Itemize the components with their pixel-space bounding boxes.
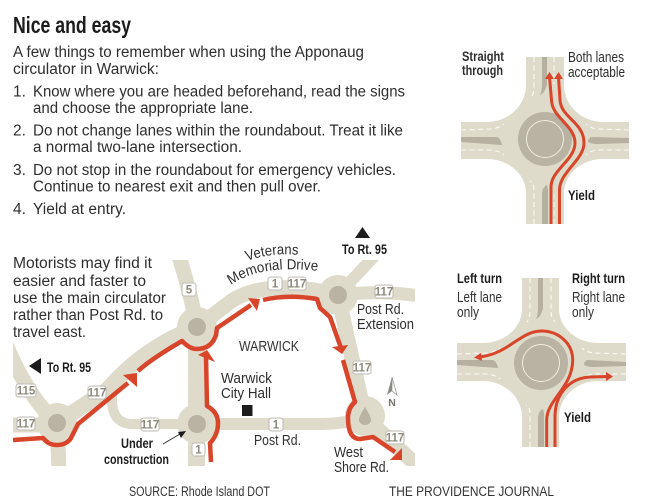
label: under construction: construction xyxy=(104,452,169,467)
intro and numbered tips: 3. xyxy=(13,162,26,179)
label: to Rt. 95 west xyxy=(29,358,91,375)
diagram: straight through roundabout xyxy=(461,49,629,224)
route number badges: 115 xyxy=(17,386,36,398)
intro and numbered tips xyxy=(13,44,405,218)
label: West Shore Rd. xyxy=(334,445,389,476)
red route lines xyxy=(545,72,584,224)
label: straight through: through xyxy=(462,63,503,78)
callout: motorists note: easier and faster to xyxy=(13,273,146,290)
label: Warwick: WARWICK xyxy=(239,339,299,355)
red circulator route xyxy=(13,297,402,462)
label: Post Rd. Extension xyxy=(357,302,414,333)
label: right turn: Right turn xyxy=(572,271,625,286)
red route lines xyxy=(474,331,613,447)
callout: motorists note: travel east. xyxy=(13,324,86,341)
intro and numbered tips: Do not change lanes within the roundabout. Treat it like xyxy=(33,122,403,140)
icon: north arrow: N xyxy=(388,397,396,409)
label: West Shore Rd.: West xyxy=(334,445,363,461)
source credit: SOURCE: Rhode Island DOT xyxy=(129,484,270,499)
map of Warwick xyxy=(12,227,415,476)
landmark: Warwick City Hall: Warwick xyxy=(221,371,273,387)
label: left turn xyxy=(457,271,502,321)
label: Post Rd. Extension: Extension xyxy=(357,317,414,333)
route number badges: 117 xyxy=(386,432,404,444)
callout: motorists note xyxy=(13,255,166,341)
label: both lanes acceptable: acceptable xyxy=(568,65,625,81)
route number badges: 117 xyxy=(17,418,35,430)
intro and numbered tips: A few things to remember when using the Apponaug xyxy=(13,44,364,61)
label: Post Rd.: Post Rd. xyxy=(254,433,301,449)
intro and numbered tips: circulator in Warwick: xyxy=(13,61,159,78)
route number badges: 1 xyxy=(273,420,280,432)
label: right turn xyxy=(572,271,625,321)
label: left turn: only xyxy=(457,305,480,321)
callout: motorists note: Motorists may find it xyxy=(13,255,153,272)
intro and numbered tips: and choose the appropriate lane. xyxy=(33,100,253,117)
route number badges xyxy=(16,277,404,456)
intro and numbered tips: Continue to nearest exit and then pull over. xyxy=(33,178,321,196)
title: Nice and easy xyxy=(13,12,131,38)
road network xyxy=(13,260,415,466)
label: to Rt. 95 north xyxy=(342,227,387,257)
label: straight through: Straight xyxy=(462,49,504,64)
route number badges: 117 xyxy=(288,278,306,290)
callout: motorists note: use the main circulator xyxy=(13,290,166,307)
intro and numbered tips: Know where you are headed beforehand, read the signs xyxy=(33,84,405,100)
route number badges: 117 xyxy=(88,388,106,400)
label: West Shore Rd.: Shore Rd. xyxy=(334,460,389,476)
label: left turn: Left lane xyxy=(457,290,502,306)
route number badges: 117 xyxy=(375,286,393,298)
label: both lanes acceptable xyxy=(568,50,625,81)
route number badges: 117 xyxy=(353,362,371,374)
publisher credit: THE PROVIDENCE JOURNAL xyxy=(389,484,554,499)
route number badges: 1 xyxy=(195,444,202,456)
landmark: Warwick City Hall xyxy=(221,371,273,416)
label: to Rt. 95 north: To Rt. 95 xyxy=(342,242,387,257)
intro and numbered tips: Do not stop in the roundabout for emergency vehicles. xyxy=(33,162,396,179)
landmark: Warwick City Hall: City Hall xyxy=(221,386,271,402)
intro and numbered tips: a normal two-lane intersection. xyxy=(33,139,242,156)
label: Veterans Memorial Drive xyxy=(226,246,318,284)
label: right turn: only xyxy=(572,305,595,321)
intro and numbered tips: 2. xyxy=(13,122,26,140)
label: yield: Yield xyxy=(564,410,591,425)
label: Post Rd. Extension: Post Rd. xyxy=(357,302,404,318)
route number badges: 117 xyxy=(141,420,159,432)
route number badges: 5 xyxy=(186,284,193,296)
label: yield: Yield xyxy=(568,188,595,203)
diagram: left and right turn roundabout xyxy=(457,271,626,447)
label: under construction xyxy=(104,431,186,467)
label: to Rt. 95 west: To Rt. 95 xyxy=(47,360,91,375)
label: under construction: Under xyxy=(121,436,154,451)
roundabout pavement xyxy=(461,57,629,224)
roundabout pavement xyxy=(457,278,626,447)
label: straight through xyxy=(462,49,504,78)
icon: north arrow xyxy=(387,377,397,409)
intro and numbered tips: Yield at entry. xyxy=(33,201,126,218)
route number badges: 1 xyxy=(272,278,279,290)
callout: motorists note: rather than Post Rd. to xyxy=(13,307,163,324)
label: right turn: Right lane xyxy=(572,290,625,306)
label: both lanes acceptable: Both lanes xyxy=(568,50,624,66)
label: Veterans Memorial Drive: Memorial Drive xyxy=(226,259,318,284)
label: left turn: Left turn xyxy=(457,271,502,286)
label: Veterans Memorial Drive: Veterans xyxy=(244,246,298,260)
intro and numbered tips: 4. xyxy=(13,201,26,218)
intro and numbered tips: 1. xyxy=(13,84,26,100)
